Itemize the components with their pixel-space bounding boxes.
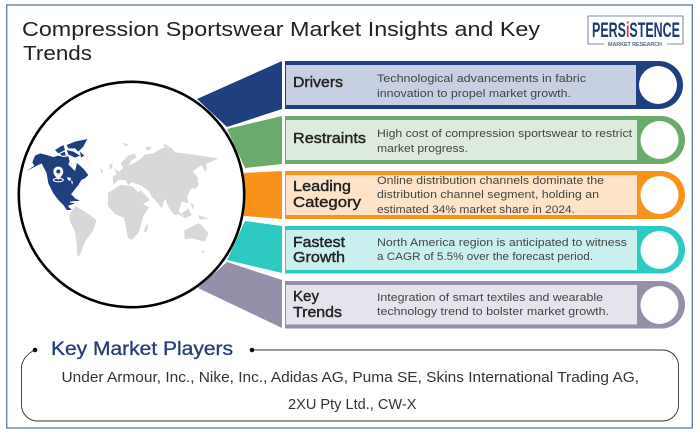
panel: fastest growth: Growth xyxy=(293,250,345,266)
panel: restraints: market progress. xyxy=(377,143,468,155)
panel: key market players xyxy=(21,339,678,421)
panel: restraints xyxy=(285,116,685,164)
panel: restraints: High cost of compression sportswear to restrict xyxy=(377,128,632,140)
panel: fastest growth: a CAGR of 5.5% over the forecast period. xyxy=(377,251,593,263)
panel: restraints: Restraints xyxy=(293,131,366,147)
panel: key trends: Trends xyxy=(293,305,342,321)
logo: Persistence Market Research xyxy=(588,16,683,48)
logo: Persistence Market Research: MARKET RESEARCH xyxy=(608,42,662,48)
panel: key market players: 2XU Pty Ltd., CW-X xyxy=(288,396,416,413)
title: Trends xyxy=(23,42,92,65)
panel: fastest growth: Fastest xyxy=(293,235,345,251)
wedge: fastest growth xyxy=(227,221,282,273)
wedge: key trends xyxy=(198,262,282,328)
panel: key market players: Under Armour, Inc., Nike, Inc., Adidas AG, Puma SE, Skins International Trading AG, xyxy=(62,369,639,386)
title: Compression Sportswear Market Insights and Key xyxy=(22,18,541,41)
panel: key trends: Key xyxy=(293,289,320,305)
panel: key trends: technology trend to bolster market growth. xyxy=(377,306,609,318)
panel: leading category xyxy=(285,171,685,219)
panel: fastest growth xyxy=(285,226,685,274)
panel: drivers: Technological advancements in fabric xyxy=(377,73,587,85)
panel: fastest growth: North America region is anticipated to witness xyxy=(377,237,628,249)
Africa, South America and Oceania in grey xyxy=(69,185,208,257)
world map xyxy=(27,139,218,257)
wedge: drivers xyxy=(197,61,282,127)
panel: leading category: Online distribution channels dominate the xyxy=(377,175,604,187)
title xyxy=(22,18,541,65)
panel: drivers: Drivers xyxy=(293,75,343,91)
panel: leading category: Leading xyxy=(293,179,351,195)
panel: key trends xyxy=(285,281,685,328)
panel: leading category: estimated 34% market share in 2024. xyxy=(377,204,575,216)
panel: drivers: innovation to propel market growth. xyxy=(377,88,571,100)
North America highlighted xyxy=(27,139,88,210)
wedge: leading category xyxy=(244,171,282,219)
Great Lakes xyxy=(67,177,73,185)
panel: drivers xyxy=(285,61,683,109)
panel: key market players: Key Market Players xyxy=(51,339,233,360)
panel: leading category: Category xyxy=(293,195,362,211)
panel: leading category: distribution channel segment, holding an xyxy=(377,189,599,201)
icon: location pin xyxy=(53,166,63,182)
panel: key trends: Integration of smart textiles and wearable xyxy=(377,292,603,304)
Eurasia in grey xyxy=(100,142,218,215)
wedge: restraints xyxy=(227,116,282,168)
globe circle xyxy=(19,82,244,307)
